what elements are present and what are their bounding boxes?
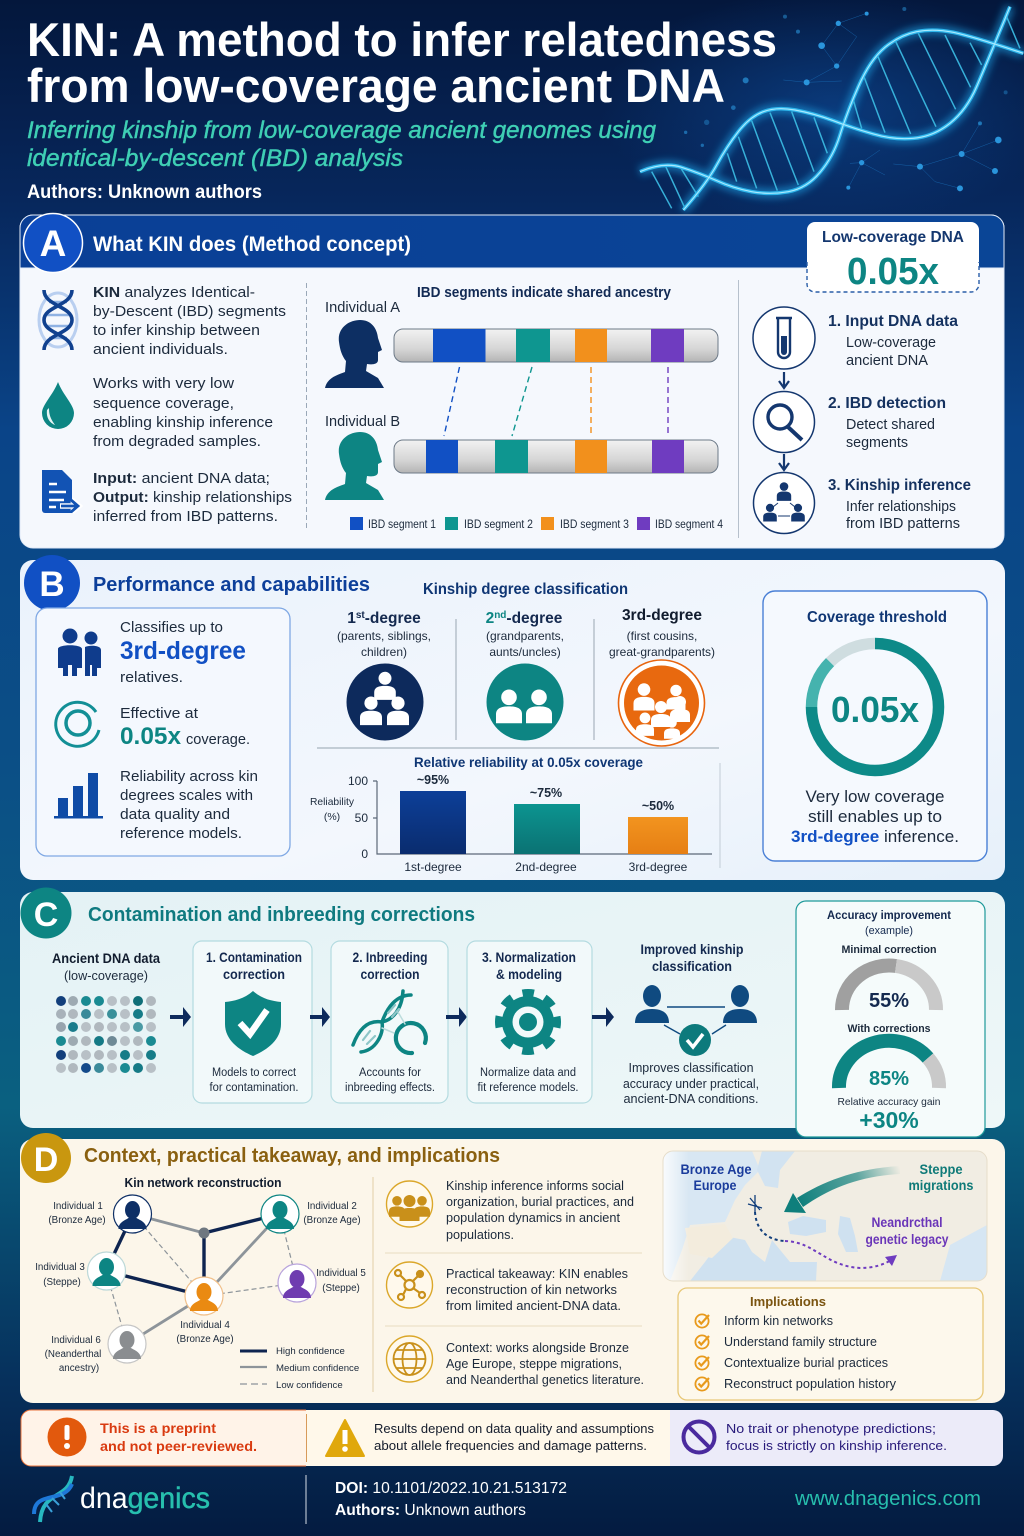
authors: Authors: Unknown authors — [27, 182, 262, 203]
callout: low-coverage DNA: 0.05x — [847, 251, 939, 293]
subtitle: Inferring kinship from low-coverage ancient genomes using — [27, 117, 657, 144]
step 1: Low-coverage — [846, 335, 936, 351]
step 2 — [828, 395, 946, 451]
icon: test tube — [753, 307, 815, 369]
second degree — [486, 610, 564, 740]
step: contamination correction: for contamination. — [210, 1082, 298, 1094]
legend: confidence — [240, 1346, 359, 1391]
legend: IBD segments: IBD segment 2 — [464, 519, 533, 531]
second degree: aunts/uncles) — [489, 645, 561, 659]
callout: low-coverage DNA — [807, 222, 979, 293]
badge D: D — [34, 1141, 58, 1179]
arrow — [170, 1007, 191, 1027]
dotted route — [755, 1212, 785, 1241]
reliability text: reference models. — [120, 826, 242, 842]
bar chart: relative reliability: 1st-degree — [404, 860, 462, 874]
context item: social organization: populations. — [446, 1227, 514, 1242]
classifies text: Classifies up to — [120, 620, 223, 636]
network labels: Individual 6 — [51, 1335, 101, 1346]
text: works with low coverage: Works with very low — [93, 375, 234, 392]
accuracy improvement card: 85% — [869, 1068, 909, 1090]
step 3 — [828, 477, 971, 532]
improved kinship classification: Improved kinship — [640, 942, 744, 957]
accuracy improvement card: Relative accuracy gain — [838, 1096, 941, 1108]
legend: IBD segments: IBD segment 3 — [560, 519, 629, 531]
text: KIN analyzes IBD: ancient individuals. — [93, 341, 228, 358]
bar chart: relative reliability — [310, 754, 720, 874]
badge C: C — [34, 896, 58, 934]
improved kinship classification: Improves classification — [628, 1061, 754, 1075]
donut gauge — [812, 644, 938, 770]
footer citation: DOI: 10.1101/2022.10.21.513172 — [335, 1480, 567, 1497]
badge C — [20, 888, 72, 938]
heading C: Contamination and inbreeding corrections — [88, 904, 475, 926]
icon: water drop — [42, 382, 74, 429]
header DNA helix illustration — [640, 7, 1023, 210]
network labels: (Bronze Age) — [48, 1215, 106, 1226]
coverage threshold box: Very low coverage — [806, 788, 944, 806]
effective text — [120, 706, 250, 750]
subtitle — [27, 117, 657, 172]
context item: literature — [386, 1336, 644, 1387]
icon: document with arrow — [42, 470, 79, 513]
kin network — [35, 1175, 366, 1391]
step: inbreeding correction: 2. Inbreeding — [352, 950, 428, 965]
text: works with low coverage: sequence coverage, — [93, 395, 234, 412]
step 1 — [828, 313, 958, 369]
chromosome A with IBD segments — [394, 329, 718, 362]
step: contamination correction — [193, 941, 312, 1103]
step 3: from IBD patterns — [846, 516, 960, 532]
kin network: Kin network reconstruction — [124, 1175, 282, 1190]
text: preprint: and not peer-reviewed. — [100, 1438, 257, 1454]
network labels: Individual 4 — [180, 1320, 230, 1331]
second degree: (grandparents, — [486, 629, 564, 643]
legend: confidence: High confidence — [276, 1346, 345, 1357]
arrow — [310, 1007, 330, 1027]
implications box: Reconstruct population history — [724, 1377, 897, 1391]
map labels — [680, 1162, 974, 1247]
footer citation: Authors: Unknown authors — [335, 1502, 526, 1519]
legend: IBD segments: IBD segment 1 — [368, 519, 436, 531]
panel C: contamination and inbreeding corrections — [20, 888, 1005, 1128]
text: assumptions: Results depend on data quality and assumptions — [374, 1421, 654, 1436]
heading D: Context, practical takeaway, and implications — [84, 1145, 500, 1167]
arrow — [446, 1007, 467, 1027]
icon: alert — [48, 1418, 86, 1456]
text: input and output: Output: kinship relationships — [93, 489, 292, 506]
bar chart: relative reliability: ~75% — [530, 786, 562, 800]
icon: verified relationship — [635, 985, 757, 1056]
footer citation — [335, 1480, 567, 1519]
panel A: what KIN does — [20, 214, 1004, 548]
effective text: coverage. — [186, 732, 250, 748]
badge A: A — [40, 223, 66, 264]
accuracy improvement card — [796, 901, 985, 1137]
coverage threshold box: still enables up to — [808, 808, 942, 826]
implications box: Contextualize burial practices — [724, 1356, 888, 1370]
text: no trait predictions — [726, 1421, 947, 1453]
map labels: Steppe — [920, 1162, 963, 1177]
bar chart: relative reliability: 2nd-degree — [515, 860, 577, 874]
reliability text: Reliability across kin — [120, 769, 258, 785]
third degree: (first cousins, — [627, 629, 697, 643]
icon: DNA helix — [39, 290, 77, 350]
network labels: Individual 3 — [35, 1262, 85, 1273]
step: contamination correction: 1. Contamination — [206, 950, 302, 965]
text: input and output: Input: ancient DNA data; — [93, 470, 270, 487]
badge B: B — [39, 565, 65, 604]
text: no trait predictions: No trait or phenotype predictions; — [726, 1421, 936, 1436]
arrow — [779, 454, 789, 470]
accuracy improvement card: 55% — [869, 990, 909, 1012]
ancient DNA data: Ancient DNA data — [52, 951, 160, 966]
context item: social organization: Kinship inference informs social — [446, 1178, 624, 1193]
implications box: Implications — [750, 1294, 826, 1309]
implications box: Inform kin networks — [724, 1314, 833, 1328]
step 3: Infer relationships — [846, 499, 956, 515]
classifies text — [120, 620, 246, 686]
steppe migration arrow — [797, 1166, 900, 1207]
first degree — [337, 610, 431, 740]
icon: target — [56, 702, 99, 746]
third degree: great-grandparents) — [609, 645, 715, 659]
context item: social organization — [386, 1178, 634, 1242]
third degree — [609, 607, 715, 746]
text: KIN analyzes IBD: to infer kinship between — [93, 322, 260, 339]
step: inbreeding correction: inbreeding effects. — [345, 1082, 435, 1094]
first degree: children) — [361, 645, 407, 659]
step: inbreeding correction — [331, 941, 448, 1103]
step 2: 2. IBD detection — [828, 395, 946, 412]
warning strip — [21, 1410, 1003, 1466]
accuracy improvement card: (example) — [865, 925, 913, 937]
network nodes — [88, 1195, 316, 1363]
context item: practical takeaway: from limited ancient-DNA data. — [446, 1298, 621, 1313]
context item: social organization: population dynamics in ancient — [446, 1210, 620, 1225]
context item: practical takeaway — [386, 1262, 628, 1313]
website: www.dnagenics.com — [794, 1488, 981, 1510]
classifies text: relatives. — [120, 670, 183, 686]
network labels: (Steppe) — [322, 1283, 360, 1294]
reliability text — [120, 769, 258, 842]
improved kinship classification: ancient-DNA conditions. — [624, 1092, 758, 1106]
coverage threshold box: 3rd-degree inference. — [791, 828, 959, 846]
first degree: (parents, siblings, — [337, 629, 431, 643]
icon: DNA with ring — [353, 991, 426, 1053]
legend: confidence: Medium confidence — [276, 1363, 359, 1374]
step 1: ancient DNA — [846, 353, 928, 369]
coverage threshold box: Coverage threshold — [807, 609, 947, 626]
reliability text: degrees scales with — [120, 788, 253, 804]
step 2: segments — [846, 435, 908, 451]
step: normalization and modeling: 3. Normalization — [482, 950, 576, 965]
step: contamination correction: correction — [223, 967, 285, 982]
text: assumptions — [374, 1421, 654, 1453]
arrow — [779, 372, 789, 388]
network edges — [106, 1214, 297, 1344]
bar chart: relative reliability: Relative reliability at 0.05x coverage — [414, 754, 643, 770]
second degree: 2nd-degree — [486, 610, 563, 627]
network labels: ancestry) — [59, 1363, 99, 1374]
context item: social organization: organization, burial practices, and — [446, 1194, 634, 1209]
map labels: Neandrcthal — [872, 1215, 942, 1230]
accuracy improvement card: With corrections — [848, 1023, 930, 1035]
implications box — [678, 1288, 983, 1400]
text: works with low coverage — [93, 375, 273, 450]
gauge: with corrections — [839, 1041, 939, 1088]
network labels: (Steppe) — [43, 1277, 81, 1288]
bar chart: relative reliability: 0 — [361, 847, 368, 861]
bar chart: relative reliability: 100 — [348, 774, 368, 788]
step 2: Detect shared — [846, 417, 935, 433]
title: KIN: A method to infer relatedness — [27, 13, 777, 66]
individual B silhouette: Individual B — [325, 414, 400, 430]
step 1: 1. Input DNA data — [828, 313, 958, 330]
map labels: genetic legacy — [866, 1232, 949, 1247]
map labels: migrations — [908, 1178, 974, 1193]
step: normalization and modeling: & modeling — [496, 967, 562, 982]
title: from low-coverage ancient DNA — [27, 59, 725, 112]
accuracy improvement card: +30% — [859, 1107, 919, 1133]
callout: low-coverage DNA: Low-coverage DNA — [822, 229, 964, 246]
accuracy improvement card: Minimal correction — [842, 944, 937, 956]
implications box: Understand family structure — [724, 1335, 877, 1349]
context item: practical takeaway: reconstruction of kin networks — [446, 1282, 617, 1297]
text: no trait predictions: focus is strictly on kinship inference. — [726, 1438, 947, 1453]
icon: magnifier — [754, 392, 814, 452]
arrow — [592, 1007, 614, 1027]
icon: prohibited — [684, 1422, 714, 1452]
context item: literature: and Neanderthal genetics literature. — [446, 1372, 644, 1387]
text: preprint: This is a preprint — [100, 1420, 216, 1436]
logo: dnagenics — [34, 1476, 210, 1522]
effective text: Effective at — [120, 706, 198, 722]
heading A: What KIN does (Method concept) — [93, 233, 411, 256]
ancient DNA data — [52, 951, 160, 1073]
dot matrix — [56, 996, 156, 1073]
legend: IBD segments — [350, 517, 724, 531]
badge B — [24, 555, 80, 611]
network labels: Individual 1 — [53, 1201, 103, 1212]
logo: dnagenics: dnagenics — [80, 1482, 210, 1515]
individual A silhouette: Individual A — [325, 300, 400, 316]
classifies text: 3rd-degree — [120, 637, 246, 665]
text: input and output: inferred from IBD patterns. — [93, 508, 278, 525]
subtitle: identical-by-descent (IBD) analysis — [27, 145, 403, 172]
gauge: minimal correction — [842, 966, 936, 1010]
accuracy improvement card: Accuracy improvement — [827, 908, 951, 922]
individual A silhouette — [325, 300, 400, 388]
icon: shield — [225, 991, 281, 1056]
text: KIN analyzes IBD: KIN analyzes Identical- — [93, 284, 255, 301]
step: normalization and modeling — [467, 941, 592, 1103]
text: input and output — [93, 470, 292, 525]
step: normalization and modeling: fit reference models. — [478, 1082, 578, 1094]
network labels: Individual 5 — [316, 1268, 366, 1279]
map labels: Bronze Age — [680, 1162, 752, 1177]
icon: warning triangle — [326, 1420, 364, 1456]
effective text: 0.05x — [120, 723, 182, 750]
improved kinship classification — [623, 942, 759, 1106]
text: assumptions: about allele frequencies and damage patterns. — [374, 1438, 647, 1453]
title — [27, 13, 777, 112]
bar chart: relative reliability: 3rd-degree — [629, 860, 688, 874]
IBD connecting dashed lines — [444, 367, 668, 436]
bar chart: relative reliability: 50 — [355, 811, 368, 825]
icon: kinship network — [754, 472, 814, 534]
text: KIN analyzes IBD: by-Descent (IBD) segments — [93, 303, 286, 320]
panel B: performance and capabilities — [20, 555, 1005, 880]
IBD diagram heading: IBD segments indicate shared ancestry — [417, 285, 671, 301]
legend: IBD segments: IBD segment 4 — [655, 519, 724, 531]
panel D: context and implications — [20, 1133, 1005, 1403]
heading B: Performance and capabilities — [93, 573, 370, 596]
coverage threshold box — [763, 591, 987, 861]
chromosome B with IBD segments — [394, 440, 718, 473]
improved kinship classification: accuracy under practical, — [623, 1077, 759, 1091]
network labels: (Neanderthal — [45, 1349, 101, 1360]
network labels: (Bronze Age) — [303, 1215, 361, 1226]
network labels — [35, 1201, 366, 1374]
icon: gear — [500, 994, 556, 1050]
improved kinship classification: classification — [652, 959, 732, 974]
ancient DNA data: (low-coverage) — [64, 968, 148, 983]
bar chart: relative reliability: Reliability — [310, 796, 355, 808]
context item: literature: Age Europe, steppe migrations, — [446, 1356, 622, 1371]
coverage threshold box: 0.05x — [831, 689, 919, 730]
capabilities box — [36, 608, 290, 856]
text: works with low coverage: enabling kinship inference — [93, 414, 273, 431]
context item: literature: Context: works alongside Bronze — [446, 1340, 629, 1355]
individual B silhouette — [325, 414, 400, 500]
step: inbreeding correction: Accounts for — [359, 1067, 421, 1079]
text: preprint — [100, 1420, 257, 1454]
map labels: Europe — [694, 1178, 737, 1193]
text: works with low coverage: from degraded samples. — [93, 433, 261, 450]
third degree: 3rd-degree — [622, 607, 702, 624]
icon: people — [58, 628, 101, 676]
badge A — [24, 214, 82, 272]
bar chart: relative reliability: ~95% — [417, 773, 449, 787]
legend: confidence: Low confidence — [276, 1380, 343, 1391]
reliability text: data quality and — [120, 807, 230, 823]
step: inbreeding correction: correction — [360, 967, 420, 982]
badge D — [21, 1133, 71, 1183]
bar chart: relative reliability: (%) — [324, 811, 340, 823]
map: migrations — [663, 1151, 987, 1281]
step: normalization and modeling: Normalize data and — [480, 1067, 576, 1079]
bar chart: relative reliability: ~50% — [642, 799, 674, 813]
icon: bars — [54, 773, 103, 818]
context item: practical takeaway: Practical takeaway: KIN enables — [446, 1266, 628, 1281]
text: KIN analyzes IBD — [93, 284, 286, 358]
kinship degree heading: Kinship degree classification — [423, 581, 628, 598]
step: contamination correction: Models to correct — [212, 1067, 297, 1079]
first degree: 1st-degree — [347, 610, 421, 627]
network labels: Individual 2 — [307, 1201, 357, 1212]
step 3: 3. Kinship inference — [828, 477, 971, 494]
network labels: (Bronze Age) — [176, 1334, 234, 1345]
